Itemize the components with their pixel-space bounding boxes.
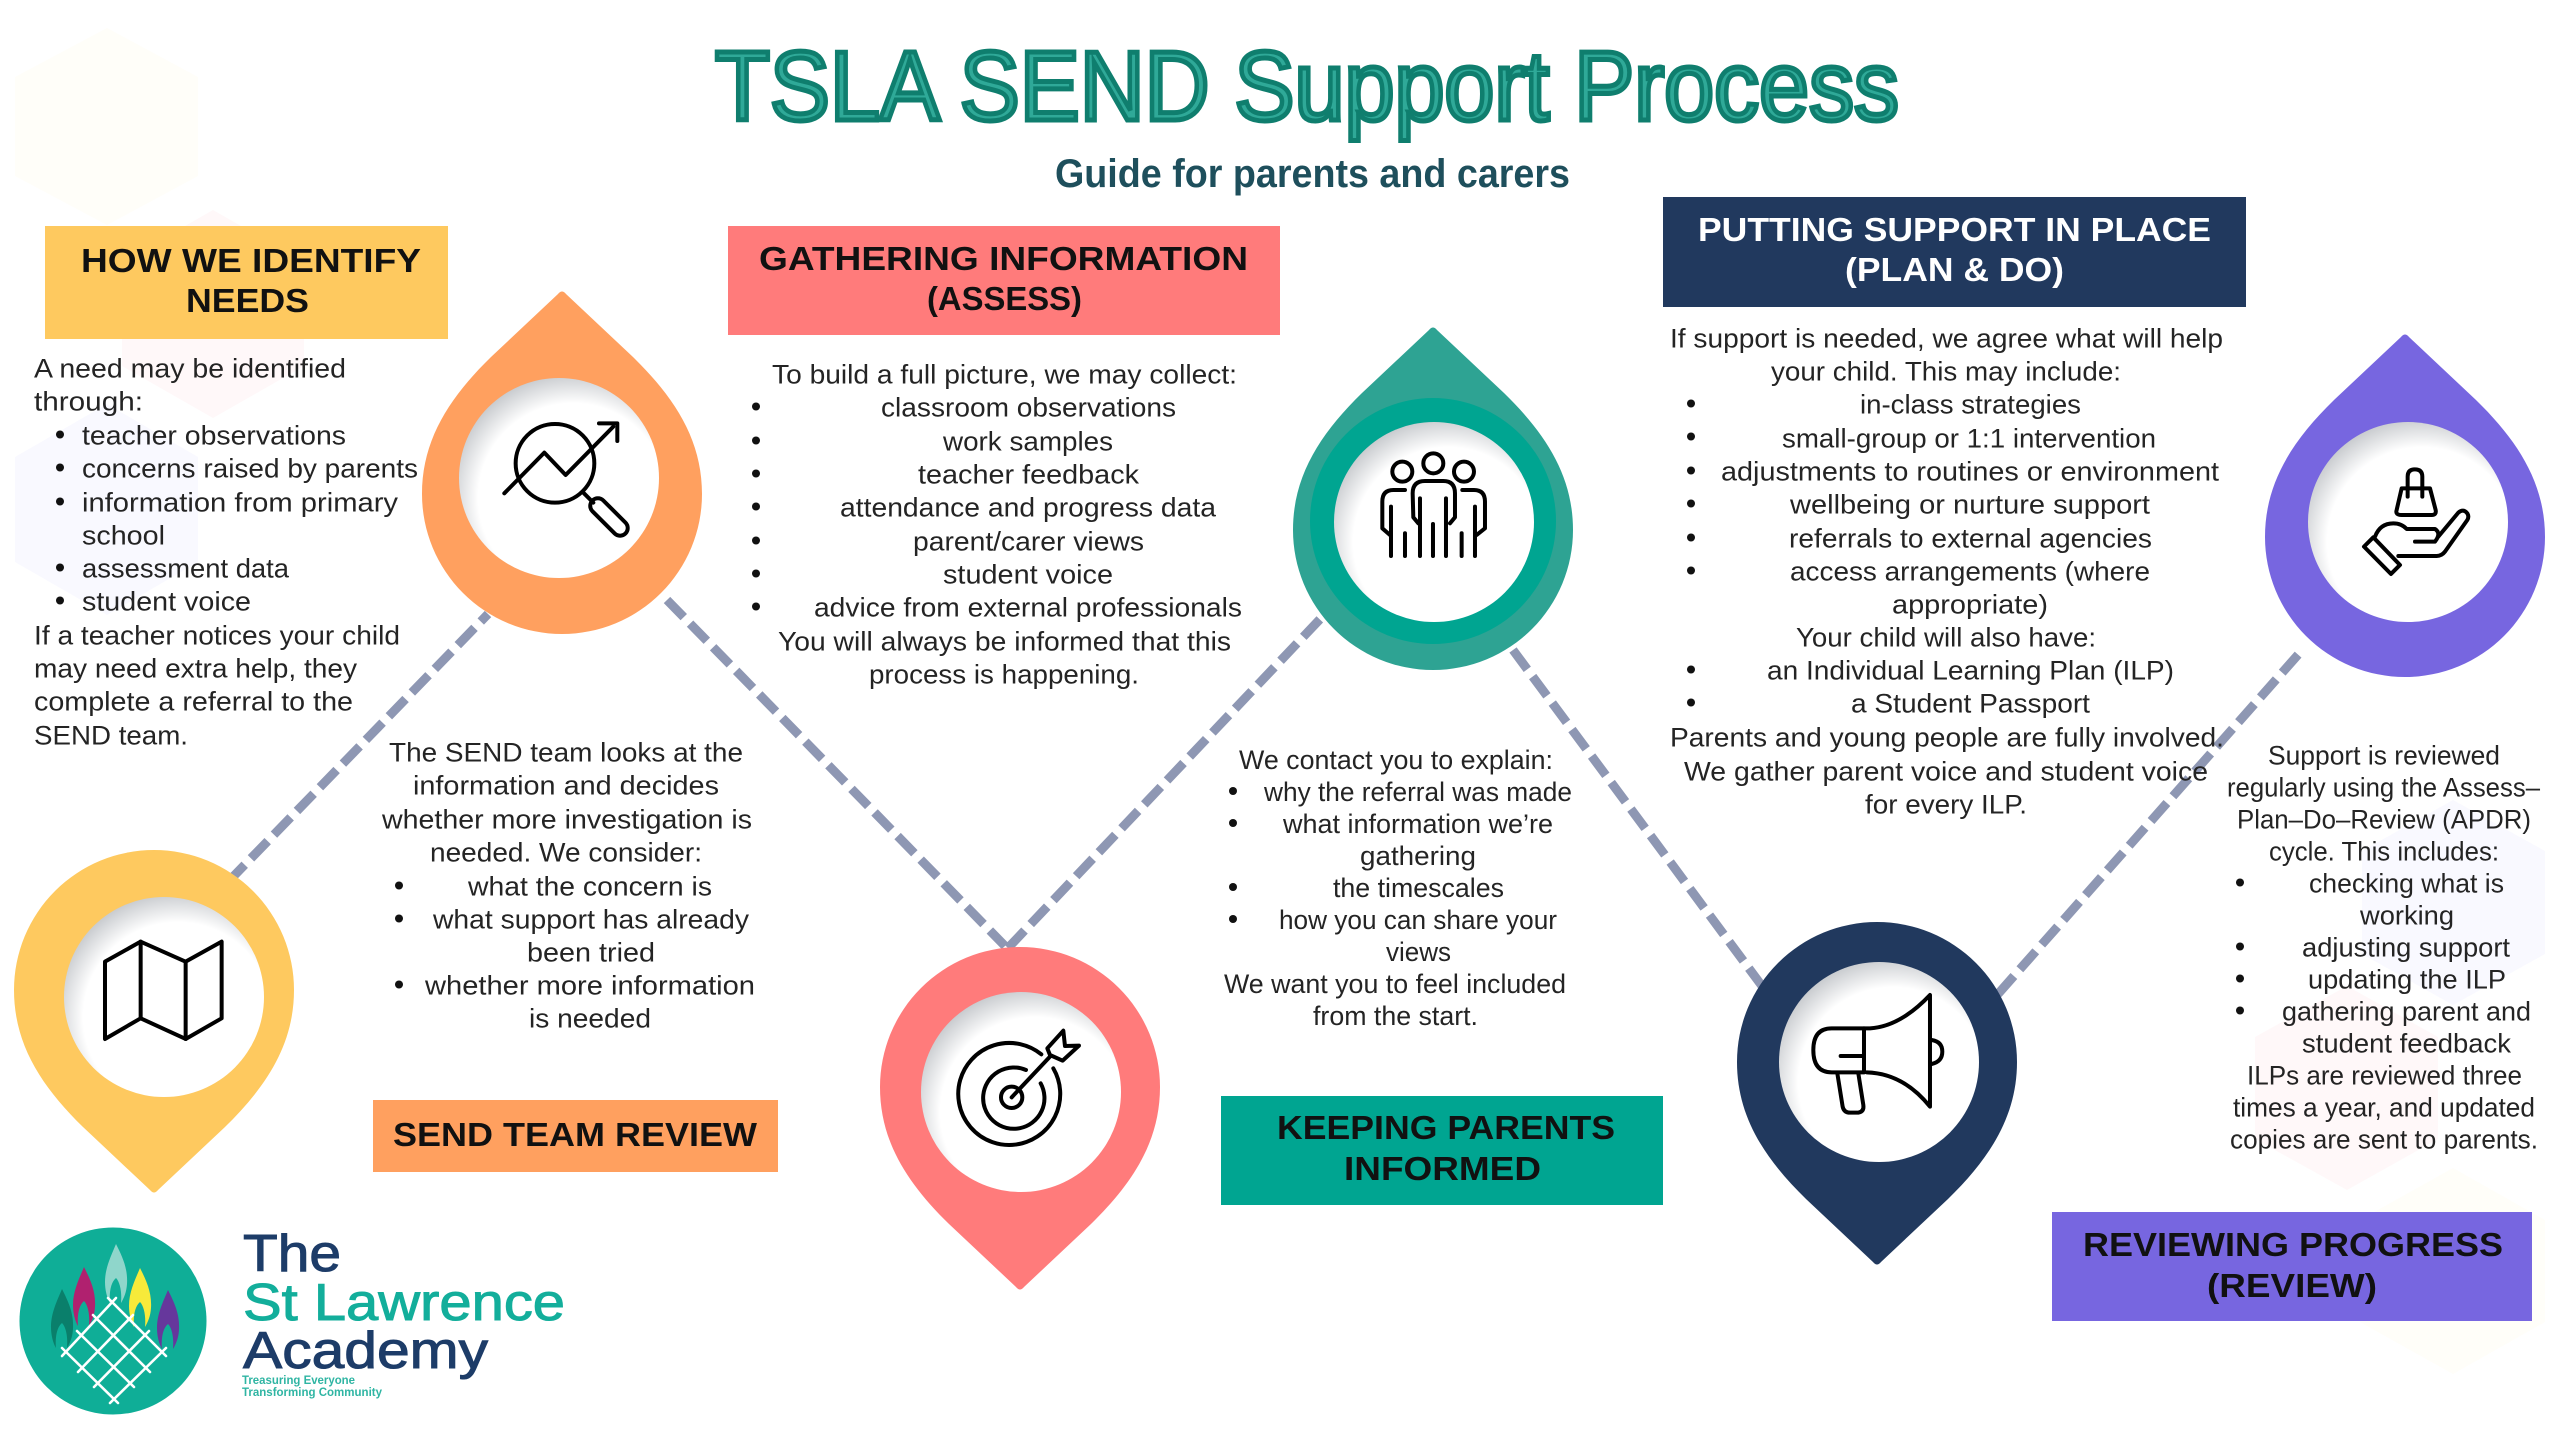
logo wordmark: Academy (243, 1322, 488, 1380)
icon: megaphone (1813, 995, 1942, 1113)
logo wordmark: The (243, 1225, 341, 1283)
text block: putting support in place: access arrangements (where (1790, 556, 2150, 586)
text block: identify needs: may need extra help, they (34, 654, 358, 684)
text block: reviewing progress: adjusting support (2302, 932, 2511, 962)
text block: reviewing progress: working (2359, 900, 2454, 930)
dashed connector path (228, 600, 2304, 994)
text block: putting support in place: referrals to external agencies (1789, 524, 2152, 554)
text block: reviewing progress: checking what is (2309, 868, 2504, 898)
heading: reviewing progress (2052, 1212, 2532, 1321)
icon: group of people (1382, 453, 1485, 556)
text block: gathering information (752, 360, 1242, 690)
icon: magnifier with growth arrow (504, 423, 631, 539)
text block: putting support in place: If support is needed, we agree what will help (1670, 324, 2223, 354)
heading: how we identify needs: HOW WE IDENTIFY (81, 242, 421, 279)
heading: gathering information (728, 226, 1280, 335)
icon: folded map (105, 942, 222, 1039)
heading: reviewing progress: REVIEWING PROGRESS (2083, 1226, 2503, 1263)
text block: putting support in place: appropriate) (1892, 590, 2048, 620)
text block: keeping parents informed: what information we’re (1282, 809, 1553, 839)
logo: St Lawrence Academy (20, 1225, 565, 1414)
text block: identify needs: through: (34, 386, 143, 416)
text block: reviewing progress (2227, 740, 2540, 1154)
panel: putting support in place (1663, 197, 2246, 820)
text block: putting support in place: We gather parent voice and student voice (1684, 756, 2208, 786)
text block: putting support in place (1670, 324, 2224, 820)
text block: identify needs: information from primary (82, 488, 399, 518)
heading: send team review: SEND TEAM REVIEW (393, 1116, 758, 1153)
text block: putting support in place: a Student Passport (1851, 688, 2091, 718)
text block: reviewing progress: regularly using the Assess– (2227, 772, 2540, 802)
panel: gathering information (728, 226, 1280, 690)
panel: how we identify needs (34, 226, 448, 750)
text block: identify needs: SEND team. (34, 720, 188, 750)
text block: gathering information: student voice (943, 560, 1113, 590)
title: TSLA SEND Support Process (715, 31, 1899, 141)
text block: keeping parents informed: from the start. (1313, 1001, 1478, 1031)
text block: reviewing progress: updating the ILP (2308, 964, 2506, 994)
text block: identify needs (34, 354, 418, 750)
text block: reviewing progress: times a year, and updated (2233, 1092, 2535, 1122)
text block: gathering information: You will always be informed that this (778, 626, 1231, 656)
text block: gathering information: work samples (942, 426, 1113, 456)
text block: gathering information: process is happening. (869, 660, 1139, 690)
text block: gathering information: To build a full picture, we may collect: (772, 360, 1237, 390)
text block: send team review: whether more information (424, 970, 755, 1000)
text block: send team review: whether more investigation is (381, 804, 752, 834)
text block: keeping parents informed: We contact you to explain: (1239, 745, 1553, 775)
text block: keeping parents informed: how you can share your (1279, 905, 1557, 935)
text block: keeping parents informed: why the referral was made (1263, 777, 1572, 807)
text block: reviewing progress: copies are sent to parents. (2230, 1124, 2538, 1154)
text block: reviewing progress: student feedback (2302, 1028, 2512, 1058)
text block: identify needs: complete a referral to the (34, 686, 353, 716)
text block: reviewing progress: gathering parent and (2282, 996, 2531, 1026)
heading: keeping parents informed: INFORMED (1344, 1150, 1541, 1187)
text block: keeping parents informed (1224, 745, 1572, 1031)
heading: putting support in place (1663, 197, 2246, 307)
logo emblem (20, 1228, 206, 1414)
logo wordmark: Treasuring Everyone (242, 1373, 355, 1387)
text block: send team review: been tried (527, 938, 655, 968)
text block: putting support in place: adjustments to routines or environment (1721, 456, 2220, 486)
text block: reviewing progress: Support is reviewed (2268, 740, 2500, 770)
pin: orange identify needs (422, 292, 702, 634)
text block: putting support in place: in-class strategies (1860, 390, 2081, 420)
text block: identify needs: A need may be identified (34, 354, 346, 384)
text block: identify needs: concerns raised by parents (82, 454, 418, 484)
text block: identify needs: teacher observations (82, 420, 346, 450)
text block: putting support in place: your child. This may include: (1771, 356, 2121, 386)
text block: reviewing progress: Plan–Do–Review (APDR) (2237, 804, 2531, 834)
text block: send team review: is needed (529, 1004, 651, 1034)
heading: keeping parents informed (1221, 1096, 1663, 1205)
text block: identify needs: school (82, 520, 165, 550)
heading: gathering information: (ASSESS) (927, 280, 1082, 317)
pin: yellow how we identify (14, 850, 294, 1192)
text block: identify needs: student voice (82, 586, 251, 616)
text block: gathering information: parent/carer views (913, 526, 1144, 556)
panel: send team review (373, 738, 778, 1172)
icon: target with arrow (958, 1031, 1079, 1145)
pin: navy putting support in place (1737, 922, 2017, 1264)
logo wordmark: Transforming Community (242, 1385, 382, 1399)
text block: reviewing progress: cycle. This includes: (2269, 836, 2499, 866)
text block: identify needs: assessment data (82, 554, 290, 584)
heading: how we identify needs: NEEDS (186, 282, 309, 319)
text block: putting support in place: wellbeing or nurture support (1789, 490, 2151, 520)
panel: reviewing progress (2052, 740, 2540, 1321)
heading: how we identify needs (45, 226, 448, 339)
pin: red gathering information (880, 947, 1160, 1290)
icon: hand holding bag (2364, 469, 2468, 574)
text block: identify needs: If a teacher notices your child (34, 620, 400, 650)
text block: send team review: what the concern is (467, 872, 712, 902)
text block: send team review: needed. We consider: (430, 838, 702, 868)
text block: gathering information: teacher feedback (918, 460, 1140, 490)
text block: send team review (381, 738, 755, 1034)
text block: send team review: what support has already (432, 904, 750, 934)
text block: gathering information: classroom observations (881, 392, 1176, 422)
heading: gathering information: GATHERING INFORMATION (759, 240, 1248, 277)
text block: putting support in place: small-group or 1:1 intervention (1782, 424, 2156, 454)
text block: putting support in place: Your child will also have: (1796, 622, 2096, 652)
text block: reviewing progress: ILPs are reviewed three (2247, 1060, 2522, 1090)
text block: keeping parents informed: We want you to feel included (1224, 969, 1566, 999)
text block: putting support in place: Parents and young people are fully involved. (1670, 722, 2224, 752)
heading: send team review (373, 1100, 778, 1172)
text block: keeping parents informed: gathering (1360, 841, 1476, 871)
panel: keeping parents informed (1221, 745, 1663, 1205)
subtitle: Guide for parents and carers (1055, 152, 1570, 196)
heading: putting support in place: PUTTING SUPPORT IN PLACE (1698, 211, 2211, 248)
text block: putting support in place: an Individual Learning Plan (ILP) (1767, 656, 2174, 686)
heading: putting support in place: (PLAN & DO) (1845, 251, 2064, 288)
text block: send team review: The SEND team looks at the (389, 738, 743, 768)
pin: teal keeping parents informed (1293, 328, 1573, 670)
text block: send team review: information and decides (413, 770, 719, 800)
heading: reviewing progress: (REVIEW) (2207, 1267, 2377, 1304)
text block: keeping parents informed: the timescales (1333, 873, 1504, 903)
logo wordmark (242, 1225, 565, 1399)
text block: gathering information: advice from external professionals (814, 592, 1242, 622)
logo wordmark: St Lawrence (243, 1274, 565, 1332)
text block: gathering information: attendance and progress data (840, 492, 1217, 522)
text block: putting support in place: for every ILP. (1865, 790, 2027, 820)
pin: purple reviewing progress (2265, 334, 2545, 677)
text block: keeping parents informed: views (1386, 937, 1451, 967)
heading: keeping parents informed: KEEPING PARENTS (1277, 1109, 1615, 1146)
